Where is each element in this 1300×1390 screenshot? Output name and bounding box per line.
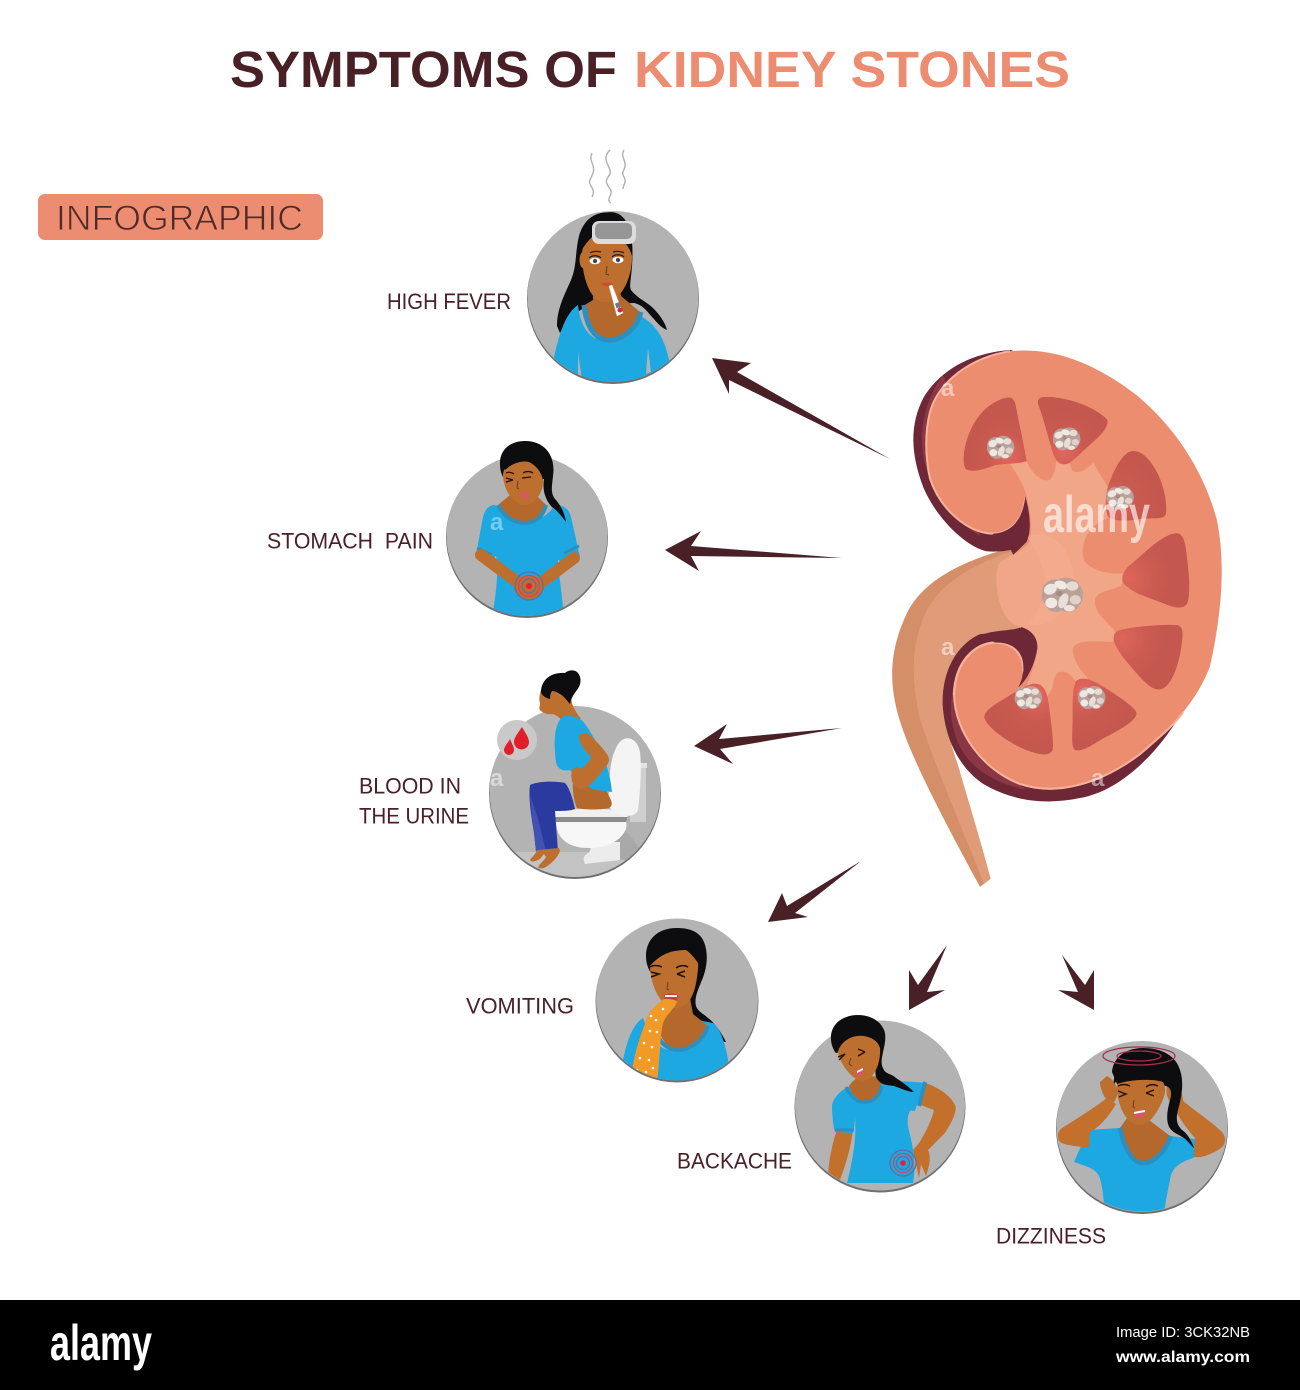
arrow: kidney to blood in urine [694,724,842,764]
watermark: a [1091,765,1105,792]
feet [530,848,560,868]
label: stomach pain: STOMACH PAIN [267,528,433,554]
tilted face [838,1033,880,1081]
right arm [1172,1100,1225,1157]
blue shirt [551,305,673,386]
thermometer [609,285,623,316]
arrow: kidney to vomiting [768,861,861,922]
floor [515,852,626,877]
title: KIDNEY STONES [634,41,1070,98]
hair back [557,212,667,333]
neck and chest [661,999,708,1048]
label: blood in the urine: BLOOD IN [359,774,461,798]
renal pelvis and calyces [996,459,1123,698]
panel: vomiting [596,918,758,1084]
neck and chest [584,293,640,338]
mouth [664,994,678,1001]
panel: high fever [527,211,699,386]
lower hilum hook [980,627,1037,687]
arrow: kidney to high fever [712,358,890,459]
watermark: a [490,509,504,536]
watermark: alamy [1043,486,1150,544]
blood sample bubble [497,720,537,760]
dark capsule upper [913,350,1013,551]
label: vomiting: VOMITING [466,994,574,1018]
footer image id: Image ID: 3CK32NB [1116,1324,1250,1341]
kidney stones [987,427,1134,709]
arrow: kidney to backache [909,945,947,1010]
hair and bun [541,670,581,704]
back wall shadow [556,830,639,860]
upper hilum hook [980,496,1030,555]
watermark: a [490,765,504,792]
neck and chest [1120,1118,1170,1163]
hip [572,783,612,810]
neck and chest [498,495,546,523]
medullary pyramids [964,397,1189,754]
face [503,461,543,505]
blue shirt [622,1018,732,1084]
label: blood in the urine [359,774,469,828]
pain target [890,1150,916,1176]
pain target [515,572,543,600]
label: high fever: HIGH FEVER [387,289,511,314]
watermark: a [941,634,955,661]
left arm [828,1130,853,1180]
toilet lid [608,738,641,816]
hair back [646,928,726,1042]
pained eyes [650,966,688,977]
footer logo: alamy [50,1315,152,1371]
face [1117,1080,1165,1125]
title [230,41,1070,98]
hands [1100,1076,1117,1102]
hair [831,1015,914,1092]
trousers [529,782,575,852]
face [650,950,698,1001]
watermark: a [941,375,955,402]
footer bar [0,1300,1300,1390]
toilet tank [630,766,646,822]
face [582,237,632,296]
icon: steam above head [590,150,625,203]
arms [481,555,574,585]
label: dizziness: DIZZINESS [996,1224,1106,1248]
mouth [1134,1110,1145,1118]
blue shirt [1074,1128,1195,1220]
panel: backache [794,1015,966,1192]
eyes [590,258,600,264]
ureter [892,547,1020,887]
dizziness rings [1103,1047,1175,1065]
arm [571,733,609,789]
arrow: kidney to stomach pain [665,531,842,571]
kidney illustration [892,350,1222,887]
blue top [555,716,612,792]
head and neck [539,685,581,722]
hair front [582,232,632,256]
toilet bowl [556,822,626,848]
blue dress [476,504,580,618]
dark capsule lower [943,631,1180,801]
hair front [650,943,698,966]
right arm [913,1083,956,1178]
kidney body [926,351,1222,789]
watermark [490,375,1150,792]
hair [500,441,566,522]
label: backache: BACKACHE [677,1148,792,1174]
hair [1112,1048,1194,1148]
title: SYMPTOMS OF [230,41,617,98]
left arm [1058,1098,1116,1148]
mouth [601,282,613,286]
panel: stomach pain [446,441,608,618]
arrow: kidney to dizziness [1058,955,1094,1010]
pained features [506,472,533,482]
badge: infographic: INFOGRAPHIC [56,199,303,238]
panel: dizziness [1056,1041,1228,1220]
footer site url: www.alamy.com [1115,1349,1250,1366]
blue shirt [832,1081,924,1183]
toilet base [584,842,620,864]
label: blood in the urine: THE URINE [359,804,469,828]
vomit stream [632,999,677,1083]
neck and chest [849,1075,882,1102]
panel: blood in the urine [489,670,661,882]
cold compress [592,221,636,244]
toilet seat [554,809,628,820]
